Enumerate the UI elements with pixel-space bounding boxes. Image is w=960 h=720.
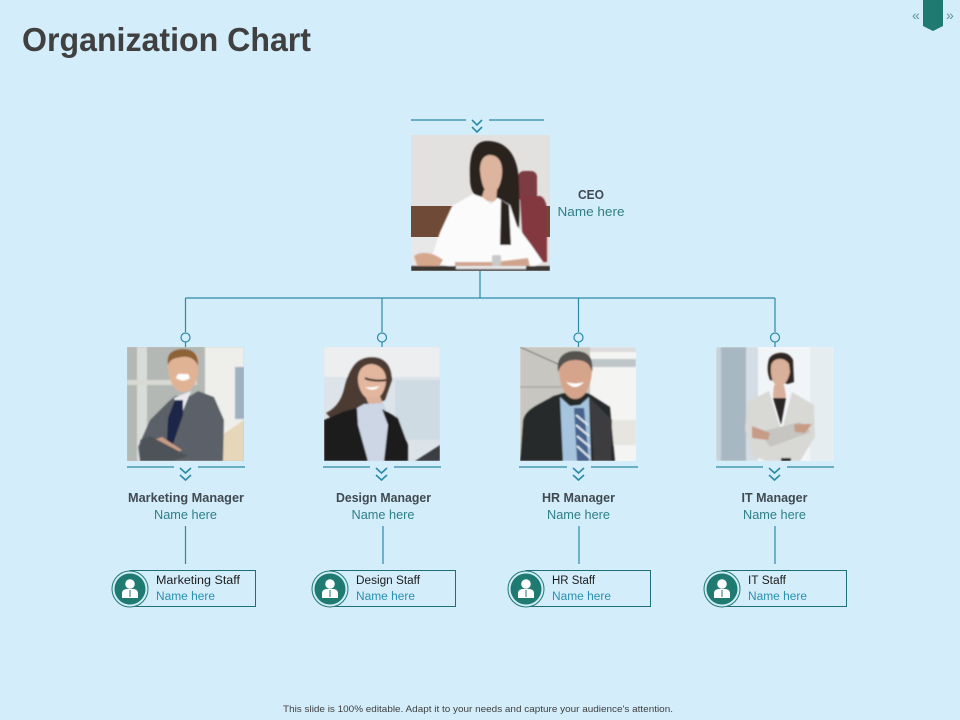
column: IT Manager	[704, 467, 846, 607]
column: HR Manager	[508, 467, 650, 607]
staff card	[312, 570, 456, 607]
column: Marketing Manager	[112, 467, 256, 607]
connector lines	[181, 271, 780, 564]
navigation bookmark icon: «	[912, 7, 920, 23]
chevron divider	[716, 467, 834, 480]
manager label: Design Manager	[336, 491, 431, 505]
CEO label: Name here	[558, 204, 624, 219]
staff card: IT Staff	[748, 575, 787, 587]
navigation bookmark icon: »	[946, 7, 954, 23]
staff card: Name here	[552, 591, 611, 603]
photo: CEO	[411, 135, 550, 271]
photo: Marketing Manager	[127, 347, 244, 461]
manager label	[542, 491, 615, 522]
staff card: HR Staff	[552, 575, 596, 587]
staff card: Marketing Staff	[156, 575, 241, 587]
manager label: Name here	[547, 508, 610, 522]
staff card: Name here	[156, 591, 215, 603]
manager label	[742, 491, 808, 522]
staff card	[112, 570, 256, 607]
chevron divider	[519, 467, 638, 480]
manager label: HR Manager	[542, 491, 615, 505]
footer note: This slide is 100% editable. Adapt it to your needs and capture your audience's attention.	[283, 704, 673, 715]
manager label: Marketing Manager	[128, 491, 244, 505]
column: Design Manager	[312, 467, 456, 607]
chevron divider	[323, 467, 441, 480]
staff card	[704, 570, 846, 607]
manager label: Name here	[743, 508, 806, 522]
photo: IT Manager	[716, 347, 833, 461]
staff card: Name here	[356, 591, 415, 603]
navigation bookmark icon	[912, 0, 954, 31]
manager label	[336, 491, 431, 522]
title: Organization Chart	[22, 21, 311, 58]
staff card: Design Staff	[356, 575, 421, 587]
photo: HR Manager	[520, 347, 636, 461]
photo: Design Manager	[324, 347, 440, 461]
chevron divider	[127, 467, 245, 480]
CEO label	[558, 188, 624, 219]
manager label: Name here	[154, 508, 217, 522]
staff card	[508, 570, 650, 607]
CEO label: CEO	[578, 188, 604, 202]
staff card: Name here	[748, 591, 807, 603]
manager label: Name here	[352, 508, 415, 522]
manager label	[128, 491, 244, 522]
CEO chevron divider	[411, 120, 544, 132]
manager label: IT Manager	[742, 491, 808, 505]
